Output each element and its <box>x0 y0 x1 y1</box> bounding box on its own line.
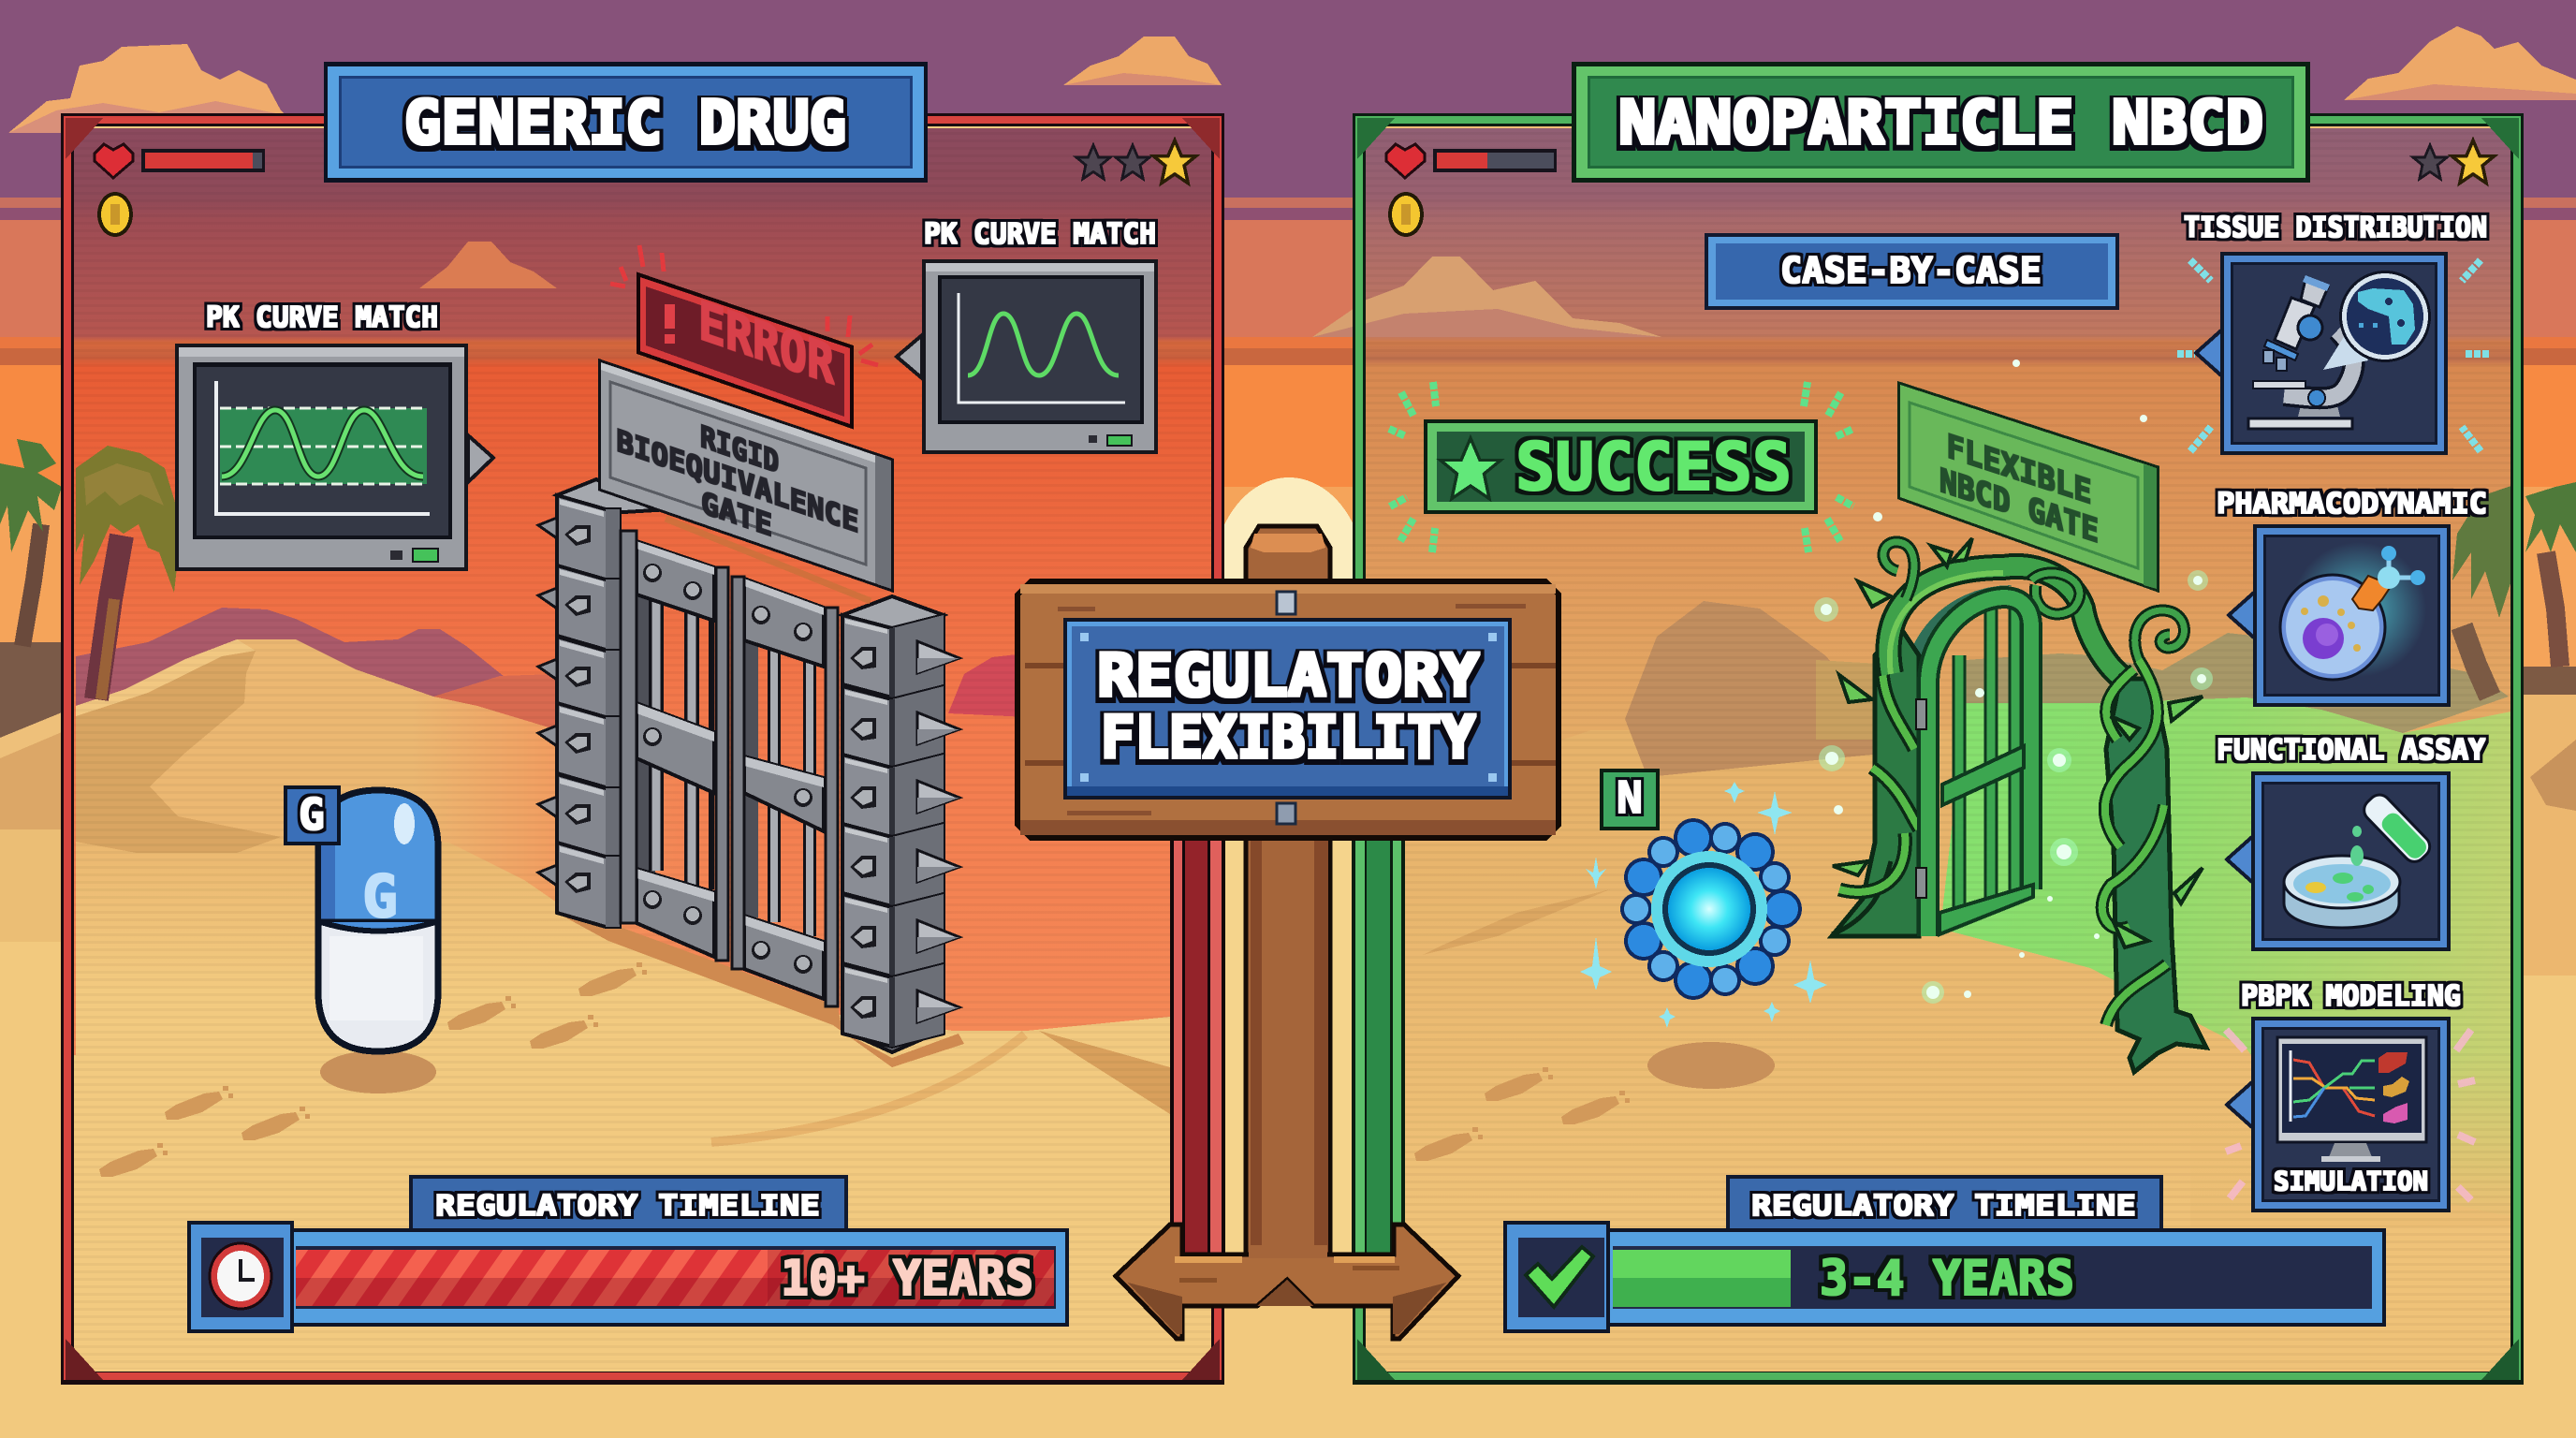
hud: right panel health <box>1386 144 1557 178</box>
icon: coin left <box>97 192 133 237</box>
blue sign plate <box>1063 618 1512 800</box>
badge: G <box>284 785 341 845</box>
panel connector: red <box>1170 838 1225 1255</box>
sparkles <box>1580 782 1827 1028</box>
panel connector: green <box>1352 838 1405 1255</box>
footprints: right panel <box>1414 1067 1630 1161</box>
icon: heart <box>95 144 133 178</box>
module label: tissue distribution: TISSUE DISTRIBUTION <box>2184 212 2487 244</box>
icon: cell with bound molecule <box>2280 542 2426 680</box>
sand: left and right outer strips <box>0 642 2576 1306</box>
duration text: 3-4 YEARS <box>1820 1251 2074 1307</box>
icon: petri dish and test tube <box>2284 790 2435 928</box>
sun <box>1212 477 1366 683</box>
orange strut under plate <box>666 519 871 601</box>
leaves <box>1833 538 2203 947</box>
badge: N: N <box>1617 772 1643 823</box>
right vine trunk <box>2102 660 2206 1072</box>
distant hills left panel <box>76 608 524 721</box>
plate: flexible nbcd gate: FLEXIBLE <box>1947 428 2091 512</box>
health bar <box>141 149 265 172</box>
door: right leaf <box>744 579 824 999</box>
plate: flexible nbcd gate <box>1900 385 2157 589</box>
module: pharmacodynamic <box>2229 524 2451 707</box>
module: functional assay <box>2227 771 2451 951</box>
stars: left panel rating <box>1076 140 1196 183</box>
hud: left panel health <box>95 144 265 178</box>
module label: functional assay: FUNCTIONAL ASSAY <box>2217 734 2485 767</box>
title: nanoparticle nbcd: NANOPARTICLE NBCD <box>1618 89 2263 158</box>
title: generic drug: GENERIC DRUG <box>404 89 846 158</box>
case-by-case badge <box>1705 233 2119 310</box>
right pillar <box>842 596 959 1052</box>
post <box>1246 526 1330 1255</box>
door stiles <box>621 531 838 1006</box>
shadow <box>1647 1042 1775 1089</box>
plate: rigid bioequivalence gate <box>601 362 891 589</box>
badge: G: G <box>299 789 325 840</box>
signpost: regulatory flexibility <box>1015 526 1561 1339</box>
simulation caption: SIMULATION <box>2274 1166 2428 1196</box>
module: pbpk modeling simulation <box>2226 1017 2475 1212</box>
flexible nbcd gate <box>1814 360 2213 1072</box>
palm tree: inside left panel <box>76 446 182 699</box>
panel: nanoparticle background <box>1354 114 2523 1384</box>
footprints: left panel <box>99 962 647 1177</box>
cloud: top right <box>2344 26 2576 100</box>
pk curve label: left monitor: PK CURVE MATCH <box>206 301 438 334</box>
door: left leaf <box>637 541 714 957</box>
left vine trunk <box>1832 627 1919 936</box>
blue sign plate: FLEXIBILITY <box>1101 703 1476 771</box>
stars: right panel rating <box>2413 140 2495 183</box>
monitor: pk curve within bioequivalence band <box>175 344 493 571</box>
palm tree: right outer <box>2525 482 2576 667</box>
nanoparticle character <box>1580 782 1827 1089</box>
title: nanoparticle nbcd <box>1572 62 2310 183</box>
wooden board <box>1015 579 1561 841</box>
timeline tab <box>409 1175 848 1231</box>
icon: check <box>1503 1221 1610 1333</box>
open door <box>1916 597 2033 936</box>
icon: monitor with pathways <box>2277 1037 2426 1162</box>
success badge: SUCCESS <box>1515 429 1792 506</box>
capsule: generic drug: G <box>362 862 398 931</box>
timeline tab: REGULATORY TIMELINE <box>1751 1190 2136 1223</box>
icon: clock <box>187 1221 294 1333</box>
panel: generic drug background <box>62 114 1223 1384</box>
particle shell <box>1622 820 1800 998</box>
panel frame: nanoparticle <box>1357 118 2519 1380</box>
timeline bar <box>1595 1228 2386 1327</box>
timeline: nanoparticle nbcd <box>1503 1175 2386 1333</box>
error alert rays <box>610 245 878 365</box>
cloud: top centre <box>1063 37 1222 85</box>
vine arch: top band and curls <box>1883 542 2184 676</box>
panel frame: generic drug <box>66 118 1220 1380</box>
sparkles around gate <box>1814 360 2213 1004</box>
arrow: left and right post feet <box>1116 1225 1458 1339</box>
pk curve label: right monitor: PK CURVE MATCH <box>924 218 1156 251</box>
error sign <box>640 277 850 424</box>
plate: rigid bioequivalence gate: RIGID <box>700 418 779 480</box>
plate: rigid bioequivalence gate: BIOEQUIVALENCE <box>616 422 859 540</box>
palm tree: inside right panel <box>2452 486 2511 697</box>
shadow <box>320 1050 436 1093</box>
duration text: 10+ YEARS <box>781 1251 1033 1307</box>
left pillar <box>538 479 655 927</box>
cloud: top left <box>8 44 304 133</box>
icon: coin right <box>1388 192 1424 237</box>
cloud: right panel <box>1312 257 1661 337</box>
vine arch: shaded inner arch <box>1899 585 2012 730</box>
monitor: pk curve <box>897 259 1158 454</box>
green hill and glow behind gate <box>1966 633 2509 733</box>
timeline tab: REGULATORY TIMELINE <box>435 1190 820 1223</box>
plate: flexible nbcd gate: NBCD GATE <box>1939 462 2099 550</box>
module label: pbpk modeling: PBPK MODELING <box>2241 980 2461 1013</box>
icon: microscope <box>2248 271 2431 429</box>
health bar <box>1433 149 1557 172</box>
module: tissue distribution <box>2177 252 2490 455</box>
module label: pharmacodynamic: PHARMACODYNAMIC <box>2217 488 2487 521</box>
cloud: left panel <box>419 242 557 288</box>
case-by-case badge: CASE-BY-CASE <box>1780 250 2042 291</box>
palm tree: left outer <box>0 439 62 646</box>
error sign: ERROR <box>698 289 834 397</box>
timeline bar <box>277 1228 1069 1327</box>
plate: rigid bioequivalence gate: GATE <box>701 484 772 544</box>
success rays <box>1389 382 1853 552</box>
success badge <box>1424 419 1818 514</box>
icon: heart <box>1386 144 1425 178</box>
magnified tissue bubble <box>2323 271 2431 370</box>
blue sign plate: REGULATORY <box>1097 641 1480 710</box>
timeline: generic drug <box>187 1175 1069 1333</box>
timeline tab <box>1726 1175 2163 1231</box>
sand dunes left panel <box>76 639 749 1058</box>
title: generic drug <box>324 62 928 183</box>
capsule: generic drug <box>318 790 438 1093</box>
badge: N <box>1600 769 1660 830</box>
rigid bioequivalence gate <box>538 362 964 1067</box>
ground shadow <box>557 903 964 1067</box>
